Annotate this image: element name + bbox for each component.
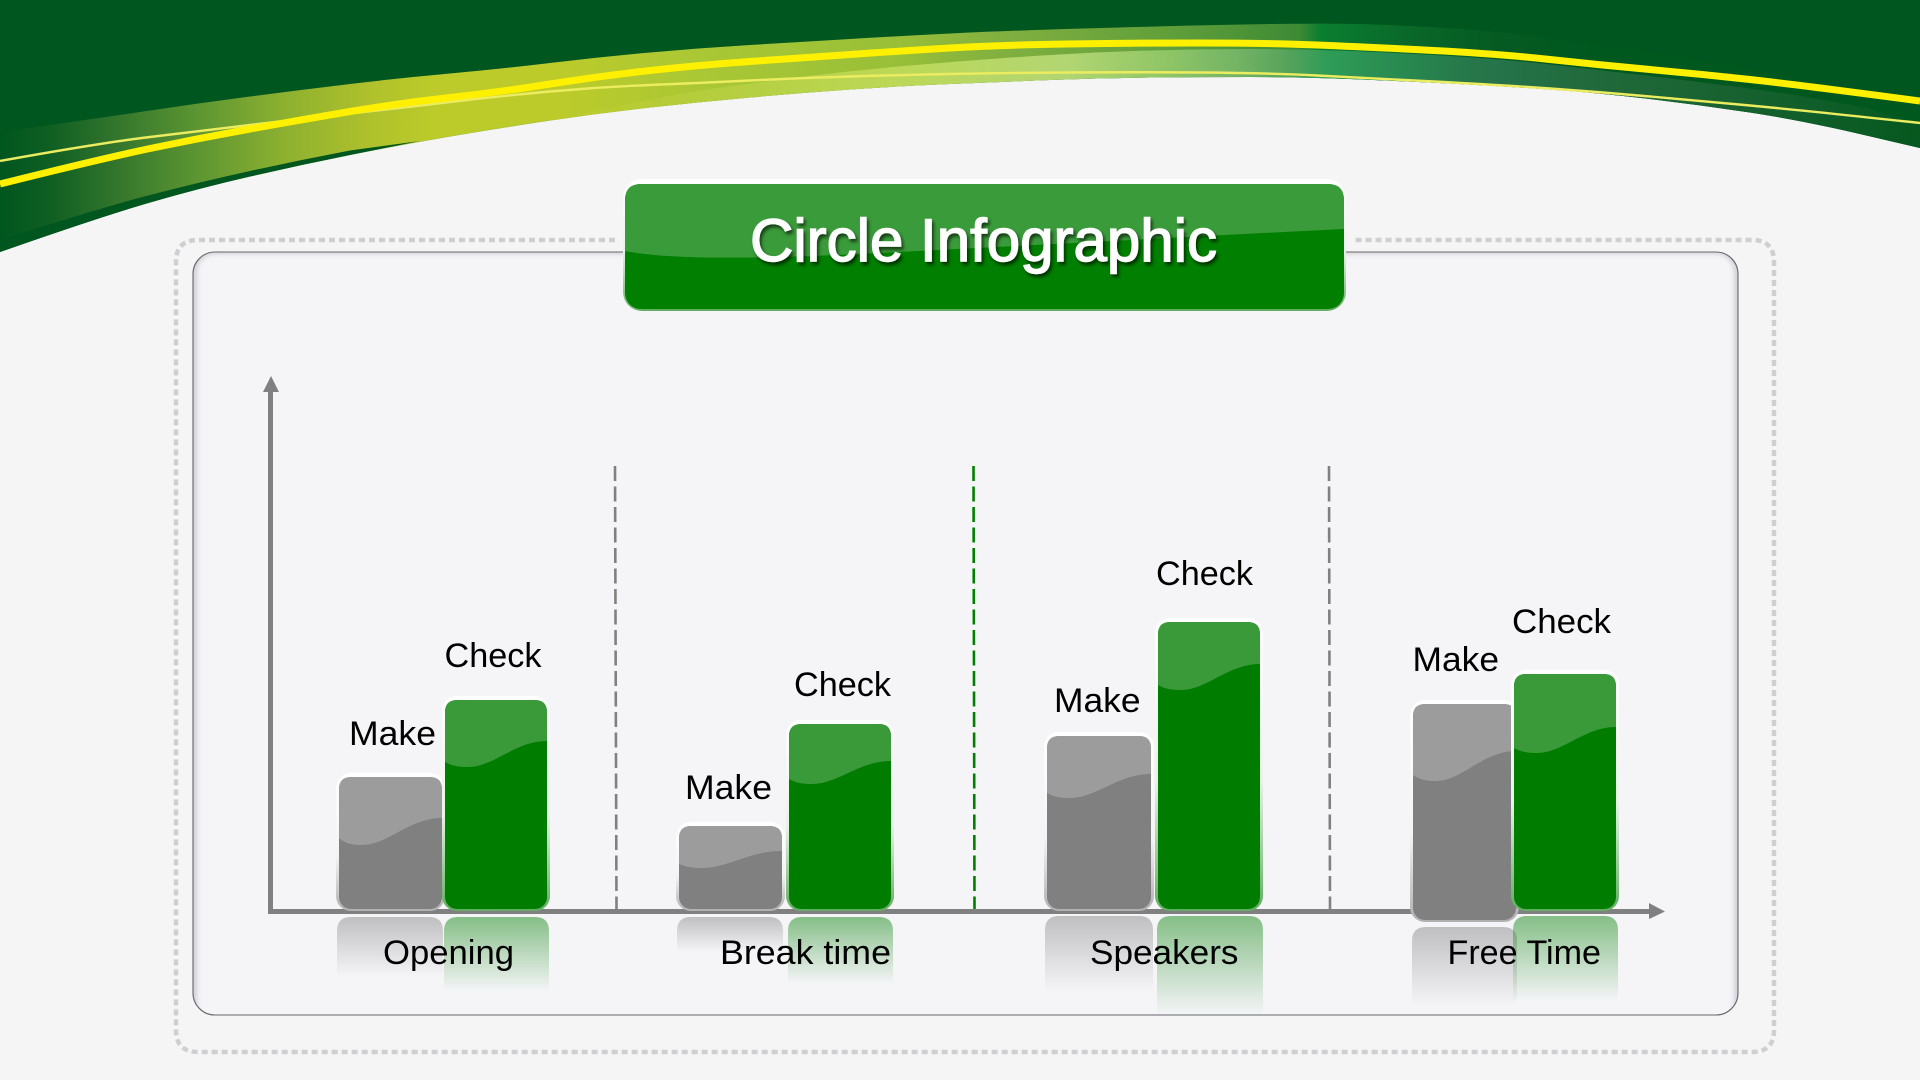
label: category: Free Time	[1448, 934, 1601, 972]
bar: make	[1410, 700, 1519, 922]
label: category: Break time	[720, 934, 891, 972]
reflection: check	[444, 917, 549, 992]
pale lower band	[550, 49, 1920, 148]
reflection: make	[1045, 916, 1153, 992]
group: Speakers	[1044, 555, 1263, 1016]
panel inner shadow	[193, 250, 1738, 1050]
reflection: make	[337, 917, 443, 977]
label: make: Make	[349, 715, 436, 753]
banner body	[625, 184, 1344, 309]
reflection: check	[1157, 916, 1263, 1016]
bar: make	[676, 822, 785, 911]
thick yellow line	[0, 43, 1920, 184]
group: Break time	[676, 666, 894, 984]
reflection: make	[677, 917, 783, 952]
title banner	[623, 179, 1346, 311]
label: category: Opening	[383, 934, 514, 972]
label: check: Check	[794, 666, 892, 704]
bar: check	[1155, 618, 1263, 911]
bar: check	[786, 720, 894, 911]
label: make: Make	[1054, 682, 1140, 720]
panel outline	[193, 252, 1738, 1015]
group: Opening	[336, 637, 550, 992]
bar: check	[442, 696, 550, 911]
lime band	[0, 24, 1920, 252]
reflection: check	[1513, 916, 1618, 1002]
banner gloss	[625, 184, 1344, 258]
label: make: Make	[1412, 641, 1499, 679]
chart panel	[193, 250, 1738, 1050]
bar: check	[1511, 670, 1619, 911]
bar: make	[1044, 732, 1154, 911]
reflection: make	[1412, 927, 1517, 1007]
banner rim	[623, 179, 1346, 311]
dark sliver under band	[0, 141, 420, 252]
background swoosh	[0, 0, 1920, 252]
label: check: Check	[1512, 603, 1612, 641]
label: check: Check	[444, 637, 543, 675]
x axis arrow	[268, 903, 1665, 919]
divider 3	[1329, 466, 1330, 909]
dotted outer frame	[176, 240, 1774, 1052]
dark green header shape	[0, 0, 1920, 252]
divider 1	[615, 466, 616, 909]
label: category: Speakers	[1090, 934, 1238, 972]
bar: make	[336, 773, 445, 911]
label: check: Check	[1156, 555, 1254, 593]
y axis arrow	[263, 376, 279, 914]
reflection: check	[788, 917, 893, 984]
label: make: Make	[685, 769, 772, 807]
thin yellow line	[0, 72, 1920, 161]
group: Free Time	[1410, 603, 1619, 1007]
divider 2 green	[974, 466, 975, 909]
title: Circle Infographic	[750, 207, 1217, 274]
